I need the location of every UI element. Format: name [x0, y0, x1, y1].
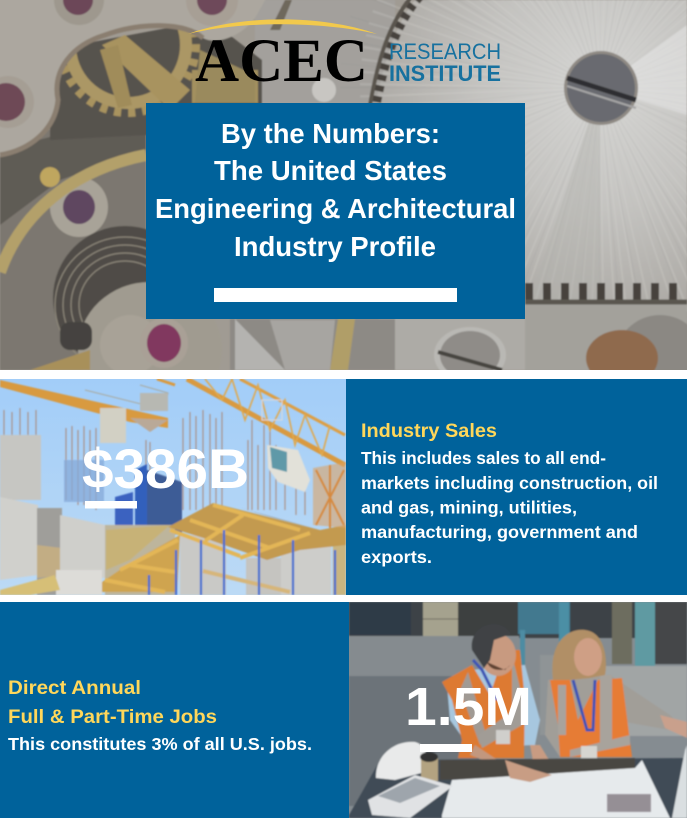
logo arc — [188, 19, 377, 34]
lower-left mechanism — [0, 110, 146, 370]
coffee — [421, 757, 438, 781]
gear teeth, top centre — [376, 0, 420, 105]
below box — [230, 319, 395, 370]
panel: industry sales text — [346, 379, 687, 595]
blue forms — [115, 492, 133, 528]
title: Industry Profile — [234, 231, 436, 262]
silver radial disc — [376, 0, 687, 304]
stat underline — [420, 744, 472, 752]
panel: industry sales photo — [0, 379, 346, 595]
title bar — [214, 288, 457, 302]
body text: markets including construction, oil — [361, 473, 658, 493]
wood plank — [203, 571, 290, 592]
vests ID — [496, 730, 510, 744]
body text — [361, 448, 658, 567]
blue props — [149, 530, 335, 595]
crane cab — [267, 445, 310, 492]
lower plate — [77, 281, 194, 370]
ACEC Research Institute logo — [188, 19, 501, 95]
body text: exports. — [361, 547, 432, 567]
screw bottom — [434, 327, 506, 370]
body text: and gas, mining, utilities, — [361, 498, 577, 518]
body text: This constitutes 3% of all U.S. jobs. — [8, 734, 312, 754]
Research: RESEARCH — [389, 39, 501, 64]
yellow formwork — [102, 535, 180, 592]
heading — [8, 677, 217, 728]
heading: Direct Annual — [8, 677, 141, 699]
brass ring — [0, 155, 146, 272]
rebar — [4, 408, 305, 515]
screw top — [564, 51, 638, 125]
copper rivet — [586, 330, 658, 370]
title: The United States — [214, 155, 447, 186]
monitor — [672, 745, 687, 818]
warehouse back wall — [349, 602, 636, 639]
floor — [349, 636, 519, 676]
panel: jobs text — [0, 602, 349, 818]
centre steel — [255, 0, 394, 103]
blue mesh — [64, 460, 104, 502]
brass gear — [62, 34, 201, 118]
stat underline — [85, 501, 137, 508]
heading: Industry Sales — [361, 420, 497, 442]
hairspring coil — [52, 226, 146, 352]
title: Engineering & Architectural — [155, 193, 516, 224]
title: By the Numbers: — [221, 118, 440, 149]
woman — [545, 630, 687, 757]
books — [368, 775, 453, 818]
man — [442, 624, 540, 758]
body text: manufacturing, government and — [361, 522, 638, 542]
stat: $386B: $386B — [82, 438, 249, 500]
jewels — [0, 76, 34, 128]
stat: 1.5M: 1.5M — [405, 677, 532, 737]
hard hat — [376, 742, 428, 780]
panel: workers photo — [349, 602, 687, 818]
body text: This includes sales to all end- — [361, 448, 606, 468]
lower-right gear — [526, 304, 687, 329]
heading: Full & Part-Time Jobs — [8, 706, 217, 728]
curved steel plate covering gear — [0, 0, 268, 157]
tablet on plan — [607, 794, 651, 812]
left crane — [0, 380, 168, 428]
hand — [505, 760, 552, 782]
title panel — [146, 103, 525, 319]
dark gear pocket — [50, 20, 262, 140]
title — [155, 118, 516, 262]
right crane — [187, 379, 345, 465]
table — [349, 758, 687, 818]
concrete buildings — [0, 435, 41, 500]
ACEC wordmark: ACEC — [195, 28, 368, 95]
Institute: INSTITUTE — [389, 61, 501, 86]
hero photo: watch gears — [0, 0, 687, 370]
blueprint — [442, 760, 670, 818]
